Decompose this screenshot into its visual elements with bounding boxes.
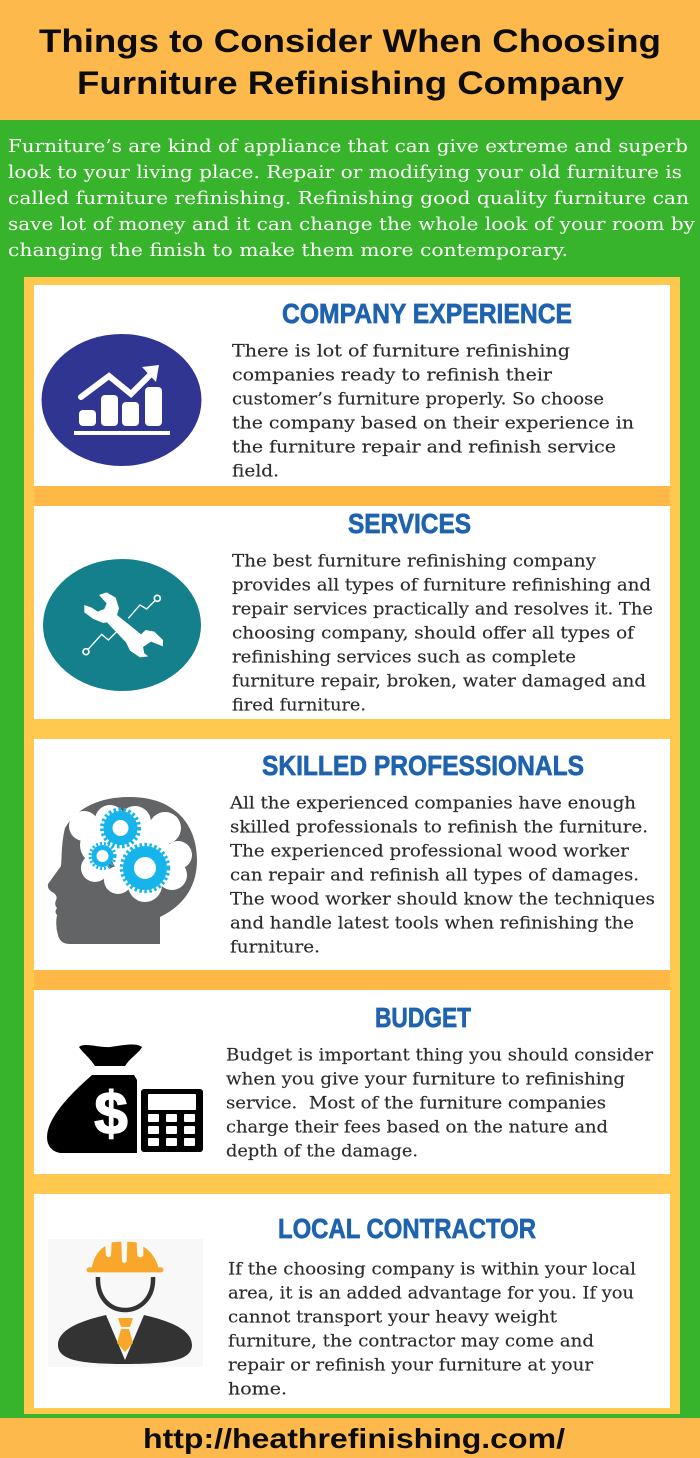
text: local contractor: home. bbox=[228, 1380, 287, 1400]
text: services: choosing company, should offer all types of bbox=[232, 624, 636, 644]
footer banner with url bbox=[0, 1418, 700, 1458]
text: company experience bbox=[232, 342, 634, 482]
icon: contractor with hard hat bbox=[48, 1239, 203, 1367]
text: budget: charge their fees based on the nature and bbox=[226, 1118, 608, 1138]
text: budget: when you give your furniture to refinishing bbox=[226, 1070, 625, 1090]
panel: local contractor bbox=[34, 1194, 670, 1408]
heading: services: SERVICES bbox=[348, 508, 471, 539]
panel: company experience bbox=[34, 285, 670, 486]
intro paragraph: Furniture’s are kind of appliance that can give extreme and superb bbox=[8, 136, 688, 157]
panel: skilled professionals bbox=[34, 739, 670, 970]
text: services: refinishing services such as complete bbox=[232, 648, 576, 668]
panel: budget bbox=[34, 990, 670, 1174]
intro paragraph: called furniture refinishing. Refinishing good quality furniture can bbox=[8, 188, 689, 209]
icon: money bag and calculator bbox=[47, 1045, 203, 1153]
icon: head with gears bbox=[48, 797, 197, 944]
title banner bbox=[0, 0, 700, 120]
text: company experience: companies ready to refinish their bbox=[232, 366, 553, 386]
text: services: provides all types of furniture refinishing and bbox=[232, 576, 651, 596]
title banner: Things to Consider When Choosing bbox=[39, 23, 661, 59]
text: skilled professionals: and handle latest tools when refinishing the bbox=[230, 914, 634, 934]
icon: growth chart bbox=[42, 334, 202, 466]
text: local contractor: area, it is an added advantage for you. If you bbox=[228, 1284, 634, 1304]
text: local contractor: cannot transport your heavy weight bbox=[228, 1308, 557, 1328]
text: budget: Budget is important thing you should consider bbox=[226, 1046, 654, 1066]
text: services bbox=[232, 552, 653, 716]
text: services: furniture repair, broken, water damaged and bbox=[232, 672, 646, 692]
text: local contractor: furniture, the contractor may come and bbox=[228, 1332, 594, 1352]
intro paragraph: save lot of money and it can change the whole look of your room by bbox=[8, 214, 696, 235]
heading: company experience: COMPANY EXPERIENCE bbox=[282, 298, 572, 329]
text: skilled professionals bbox=[229, 794, 655, 958]
heading: skilled professionals: SKILLED PROFESSIONALS bbox=[262, 750, 584, 781]
text: skilled professionals: can repair and refinish all types of damages. bbox=[230, 866, 639, 886]
panel: services bbox=[34, 506, 670, 719]
heading: budget: BUDGET bbox=[375, 1002, 471, 1033]
text: budget: service. Most of the furniture companies bbox=[226, 1094, 606, 1114]
text: local contractor bbox=[228, 1260, 636, 1400]
intro paragraph: look to your living place. Repair or modifying your old furniture is bbox=[8, 162, 682, 183]
icon: crossed wrenches bbox=[43, 559, 201, 691]
text: services: repair services practically and resolves it. The bbox=[232, 600, 653, 620]
text: budget bbox=[226, 1046, 654, 1162]
text: services: fired furniture. bbox=[232, 696, 366, 716]
yellow content panel bbox=[24, 277, 680, 1414]
text: skilled professionals: skilled professionals to refinish the furniture. bbox=[230, 818, 648, 838]
text: budget: depth of the damage. bbox=[226, 1142, 418, 1162]
title banner: Furniture Refinishing Company bbox=[77, 65, 624, 101]
text: skilled professionals: All the experienced companies have enough bbox=[229, 794, 636, 814]
text: skilled professionals: furniture. bbox=[230, 938, 320, 958]
text: skilled professionals: The experienced professional wood worker bbox=[230, 842, 630, 862]
text: services: The best furniture refinishing company bbox=[232, 552, 596, 572]
text: company experience: field. bbox=[232, 462, 279, 482]
text: skilled professionals: The wood worker should know the techniques bbox=[230, 890, 655, 910]
intro paragraph: changing the finish to make them more contemporary. bbox=[8, 240, 568, 261]
icon: money bag and calculator: $ bbox=[94, 1080, 128, 1147]
footer banner with url: http://heathrefinishing.com/ bbox=[143, 1423, 565, 1454]
text: local contractor: If the choosing company is within your local bbox=[228, 1260, 636, 1280]
intro paragraph bbox=[8, 136, 696, 261]
text: company experience: customer’s furniture properly. So choose bbox=[232, 390, 604, 410]
text: company experience: the furniture repair and refinish service bbox=[232, 438, 616, 458]
text: company experience: the company based on their experience in bbox=[232, 414, 634, 434]
heading: local contractor: LOCAL CONTRACTOR bbox=[278, 1213, 536, 1244]
text: local contractor: repair or refinish your furniture at your bbox=[228, 1356, 594, 1376]
text: company experience: There is lot of furniture refinishing bbox=[232, 342, 570, 362]
